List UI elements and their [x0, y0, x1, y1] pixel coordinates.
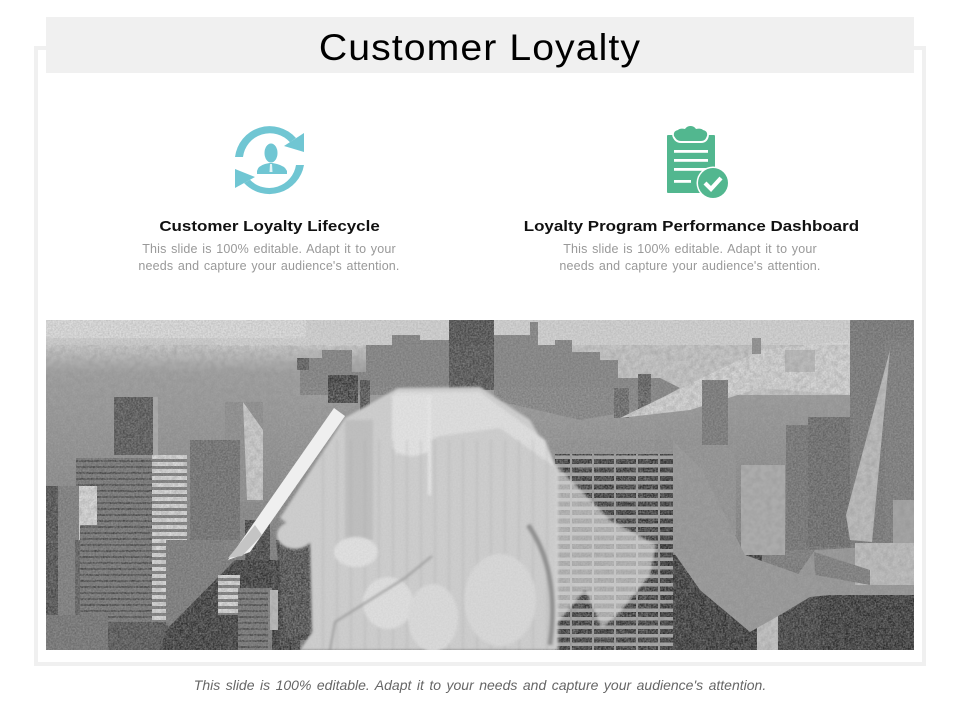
heading: loyalty program dashboard: Loyalty Program Performance Dashboard — [523, 218, 859, 235]
text block: dashboard description — [559, 242, 821, 272]
footer caption: This slide is 100% editable. Adapt it to your needs and capture your audience's attention. — [194, 677, 766, 693]
grey translucent forearm — [672, 440, 830, 632]
left city buildings — [46, 397, 390, 650]
text block: dashboard description: needs and capture your audience's attention. — [559, 258, 821, 272]
white cuff strip — [228, 408, 345, 560]
title: Customer Loyalty — [319, 27, 641, 68]
central striped building — [555, 452, 673, 650]
title — [46, 17, 914, 73]
icon: customer lifecycle cycle arrows — [235, 126, 304, 194]
icon: clipboard with check — [667, 126, 728, 198]
city coarse texture — [46, 345, 914, 650]
city haze and far skyline — [46, 320, 850, 430]
text block: lifecycle description: This slide is 100% editable. Adapt it to your — [142, 242, 396, 256]
text block: lifecycle description — [138, 242, 400, 272]
heading: customer loyalty lifecycle: Customer Loyalty Lifecycle — [160, 218, 380, 235]
right city buildings — [672, 320, 914, 650]
handshake hand — [277, 387, 656, 652]
empire state tower — [449, 320, 494, 390]
photo: city skyline with handshake overlay — [46, 320, 914, 650]
text block: dashboard description: This slide is 100% editable. Adapt it to your — [563, 242, 817, 256]
text block: lifecycle description: needs and capture your audience's attention. — [138, 258, 400, 272]
city grain — [46, 320, 914, 650]
hand grain — [280, 387, 656, 650]
